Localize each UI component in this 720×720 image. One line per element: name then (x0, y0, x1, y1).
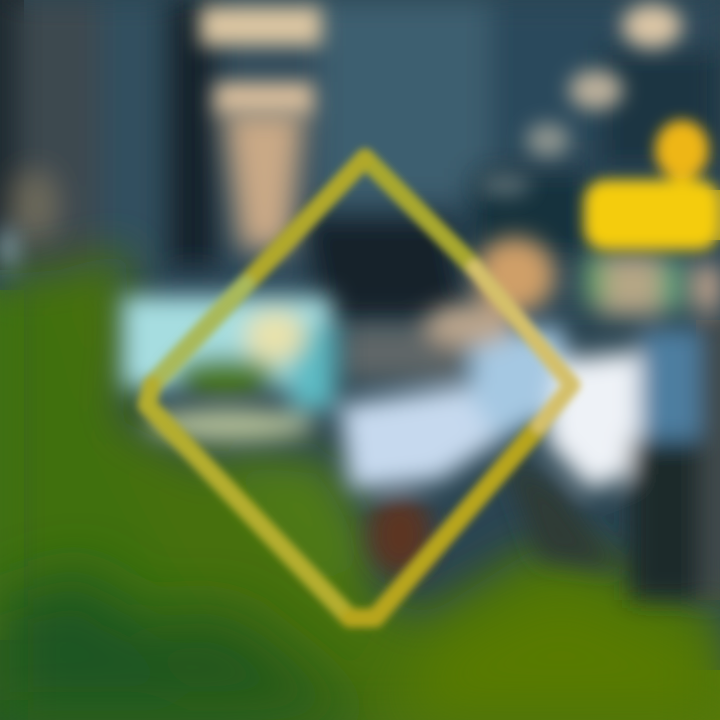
background: cream lit tower (222, 110, 306, 250)
foreground: green lawn and foliage (0, 250, 720, 720)
central water and people band (0, 226, 720, 600)
ceiling lights (200, 4, 682, 197)
background: dark building columns (0, 0, 720, 320)
foreground: dark lower left lawn (0, 570, 720, 720)
diamond outline (147, 158, 572, 618)
icon: yellow sign shape (584, 120, 720, 250)
